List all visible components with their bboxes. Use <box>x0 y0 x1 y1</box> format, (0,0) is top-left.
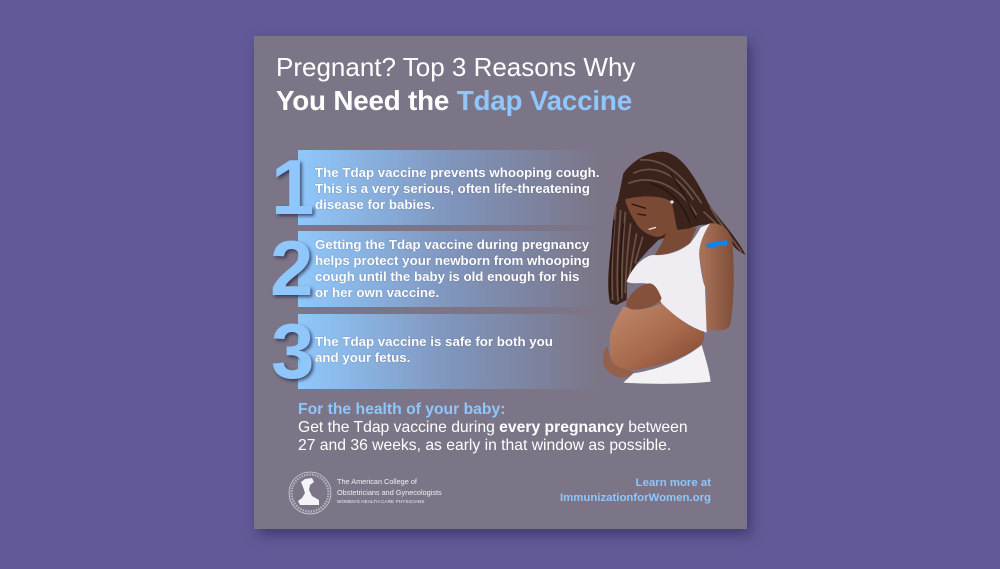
white tank top <box>627 223 710 333</box>
title line 2: You Need the Tdap Vaccine <box>276 85 632 116</box>
callout body: 27 and 36 weeks, as early in that window as possible. <box>298 437 671 454</box>
reason 1 text: The Tdap vaccine prevents whooping cough. <box>315 165 599 180</box>
reason 2 text: cough until the baby is old enough for his <box>315 269 579 284</box>
hand on belly top <box>626 283 662 310</box>
logo text: ACOG: The American College of <box>337 477 417 486</box>
arm and shoulder <box>653 223 734 330</box>
smile <box>649 227 656 229</box>
face and neck <box>625 196 697 255</box>
logo text: ACOG <box>337 477 442 504</box>
reason 3 text: The Tdap vaccine is safe for both you <box>315 334 553 349</box>
title line 1: Pregnant? Top 3 Reasons Why <box>276 52 635 82</box>
panel: reason 2 <box>270 224 590 312</box>
band 2 <box>298 231 598 307</box>
band 1 <box>298 150 598 225</box>
reason 2 text <box>315 237 590 300</box>
white waistband <box>623 345 711 384</box>
number 2: 2 <box>270 224 313 312</box>
reason 2 text: Getting the Tdap vaccine during pregnancy <box>315 237 589 252</box>
reason 2 text: helps protect your newborn from whooping <box>315 253 590 268</box>
logo text: ACOG: Obstetricians and Gynecologists <box>337 488 442 496</box>
reason 2 text: or her own vaccine. <box>315 285 439 300</box>
callout body <box>298 419 688 454</box>
number 1: 1 <box>271 143 314 231</box>
hair <box>608 152 746 305</box>
reason 3 text: and your fetus. <box>315 350 410 365</box>
learn more link: Learn more at <box>636 477 711 489</box>
callout heading: For the health of your baby: <box>298 401 505 418</box>
photo: pregnant woman with bandage <box>603 152 746 384</box>
pregnant belly <box>609 303 704 370</box>
learn more link: ImmunizationforWomen.org <box>560 492 711 504</box>
reason 3 text <box>314 334 553 365</box>
ear with earring <box>670 200 674 204</box>
eyebrow and eye <box>632 204 646 215</box>
reason 1 text <box>314 165 599 212</box>
callout body: Get the Tdap vaccine during every pregnancy between <box>298 419 688 436</box>
panel: reason 1 <box>271 143 599 231</box>
title <box>276 52 636 116</box>
panel: main card <box>254 36 747 529</box>
panel: reason 3 <box>271 307 576 395</box>
band 3 <box>298 314 598 389</box>
learn more link <box>560 477 711 504</box>
logo text: ACOG: WOMEN'S HEALTH CARE PHYSICIANS <box>337 499 424 504</box>
logo: ACOG seal <box>288 472 332 514</box>
reason 1 text: disease for babies. <box>315 197 435 212</box>
bandage <box>706 240 727 248</box>
reason 1 text: This is a very serious, often life-threatening <box>315 181 590 196</box>
hand under belly <box>603 346 633 378</box>
callout: for the health of your baby <box>298 401 688 454</box>
number 3: 3 <box>271 307 314 395</box>
